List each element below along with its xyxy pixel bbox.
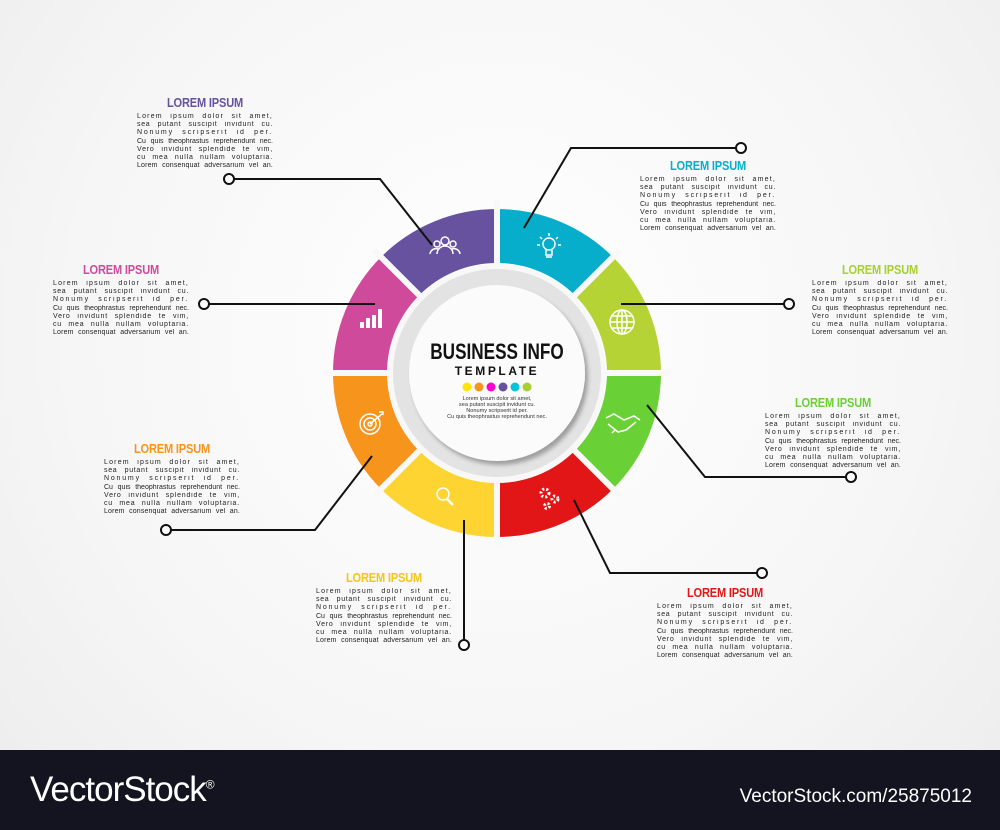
block: cyan: sea putant suscipit invidunt cu. — [640, 184, 776, 191]
block: red — [657, 585, 793, 659]
block: yellow: Cu quis theophrastus reprehendunt nec. — [316, 613, 452, 620]
block: lime: sea putant suscipit invidunt cu. — [812, 288, 948, 295]
block: cyan: Vero invidunt splendide te vim, — [640, 209, 776, 216]
block: orange: Cu quis theophrastus reprehendunt nec. — [104, 484, 240, 491]
icon: target — [360, 412, 383, 434]
block: orange: Lorem ipsum dolor sit amet, — [104, 459, 240, 466]
center circle: TEMPLATE — [455, 364, 539, 378]
footer id: VectorStock.com/25875012 — [740, 786, 972, 807]
block: purple — [137, 95, 273, 169]
block: green: Lorem consenquat adversarium vel an. — [765, 462, 901, 469]
block: purple: Lorem ipsum dolor sit amet, — [137, 113, 273, 120]
block: red: Lorem ipsum dolor sit amet, — [657, 603, 793, 610]
block: lime: cu mea nulla nullam voluptaria. — [812, 321, 948, 328]
center circle: Cu quis theophrastus reprehendunt nec. — [447, 414, 547, 420]
center circle: Lorem ipsum dolor sit amet, — [462, 396, 532, 402]
footer — [0, 750, 1000, 830]
icon: globe — [610, 310, 634, 334]
block: cyan: cu mea nulla nullam voluptaria. — [640, 217, 776, 224]
block: orange: Nonumy scripserit id per. — [104, 475, 240, 482]
center circle — [388, 264, 606, 482]
icon: handshake — [606, 414, 640, 433]
icons — [360, 233, 640, 508]
icon: people — [430, 237, 460, 254]
block: yellow: Nonumy scripserit id per. — [316, 604, 452, 611]
block: purple: Lorem consenquat adversarium vel an. — [137, 162, 273, 169]
block: orange: cu mea nulla nullam voluptaria. — [104, 500, 240, 507]
block: yellow: sea putant suscipit invidunt cu. — [316, 596, 452, 603]
block: yellow — [316, 570, 452, 644]
footer logo: VectorStock® — [30, 770, 214, 809]
block: green: Vero invidunt splendide te vim, — [765, 446, 901, 453]
block: purple: sea putant suscipit invidunt cu. — [137, 121, 273, 128]
leader lines — [166, 148, 851, 645]
block: yellow: Lorem consenquat adversarium vel an. — [316, 637, 452, 644]
block: orange: Vero invidunt splendide te vim, — [104, 492, 240, 499]
block: magenta: Nonumy scripserit id per. — [53, 296, 189, 303]
icon: magnifier — [437, 488, 453, 505]
block: red: Vero invidunt splendide te vim, — [657, 636, 793, 643]
block: orange: sea putant suscipit invidunt cu. — [104, 467, 240, 474]
block: yellow: cu mea nulla nullam voluptaria. — [316, 629, 452, 636]
block: red: Cu quis theophrastus reprehendunt nec. — [657, 628, 793, 635]
center circle: Nonumy scripserit id per. — [466, 408, 528, 414]
block: red: sea putant suscipit invidunt cu. — [657, 611, 793, 618]
segments — [333, 209, 661, 537]
block: lime — [812, 262, 948, 336]
center circle: BUSINESS INFO — [430, 340, 564, 365]
block: magenta: Vero invidunt splendide te vim, — [53, 313, 189, 320]
block: cyan — [640, 158, 776, 232]
block: cyan: Lorem consenquat adversarium vel an. — [640, 225, 776, 232]
block: purple: Vero invidunt splendide te vim, — [137, 146, 273, 153]
block: yellow: LOREM IPSUM — [346, 570, 422, 585]
block: green — [765, 395, 901, 469]
block: red: Nonumy scripserit id per. — [657, 619, 793, 626]
block: purple: cu mea nulla nullam voluptaria. — [137, 154, 273, 161]
block: magenta: Lorem consenquat adversarium vel an. — [53, 329, 189, 336]
block: green: sea putant suscipit invidunt cu. — [765, 421, 901, 428]
block: orange: LOREM IPSUM — [134, 441, 210, 456]
block: lime: Cu quis theophrastus reprehendunt nec. — [812, 305, 948, 312]
block: magenta — [53, 262, 189, 336]
block: cyan: Lorem ipsum dolor sit amet, — [640, 176, 776, 183]
block: magenta: sea putant suscipit invidunt cu. — [53, 288, 189, 295]
block: green: Lorem ipsum dolor sit amet, — [765, 413, 901, 420]
icon: chart — [360, 309, 382, 328]
block: red: Lorem consenquat adversarium vel an. — [657, 652, 793, 659]
block: red: cu mea nulla nullam voluptaria. — [657, 644, 793, 651]
block: green: Nonumy scripserit id per. — [765, 429, 901, 436]
block: lime: Nonumy scripserit id per. — [812, 296, 948, 303]
block: lime: Lorem ipsum dolor sit amet, — [812, 280, 948, 287]
block: yellow: Lorem ipsum dolor sit amet, — [316, 588, 452, 595]
block: green: LOREM IPSUM — [795, 395, 871, 410]
block: cyan: LOREM IPSUM — [670, 158, 746, 173]
block: cyan: Cu quis theophrastus reprehendunt nec. — [640, 201, 776, 208]
block: green: Cu quis theophrastus reprehendunt nec. — [765, 438, 901, 445]
block: magenta: LOREM IPSUM — [83, 262, 159, 277]
block: orange: Lorem consenquat adversarium vel an. — [104, 508, 240, 515]
block: purple: LOREM IPSUM — [167, 95, 243, 110]
block: green: cu mea nulla nullam voluptaria. — [765, 454, 901, 461]
block: magenta: Lorem ipsum dolor sit amet, — [53, 280, 189, 287]
block: magenta: cu mea nulla nullam voluptaria. — [53, 321, 189, 328]
block: orange — [104, 441, 240, 515]
center circle: sea putant suscipit invidunt cu. — [459, 402, 536, 408]
icon: gears — [541, 489, 558, 508]
block: magenta: Cu quis theophrastus reprehendunt nec. — [53, 305, 189, 312]
block: purple: Cu quis theophrastus reprehendunt nec. — [137, 138, 273, 145]
block: red: LOREM IPSUM — [687, 585, 763, 600]
block: lime: Lorem consenquat adversarium vel an. — [812, 329, 948, 336]
block: lime: Vero invidunt splendide te vim, — [812, 313, 948, 320]
block: lime: LOREM IPSUM — [842, 262, 918, 277]
block: cyan: Nonumy scripserit id per. — [640, 192, 776, 199]
block: yellow: Vero invidunt splendide te vim, — [316, 621, 452, 628]
icon: bulb — [537, 233, 561, 257]
block: purple: Nonumy scripserit id per. — [137, 129, 273, 136]
